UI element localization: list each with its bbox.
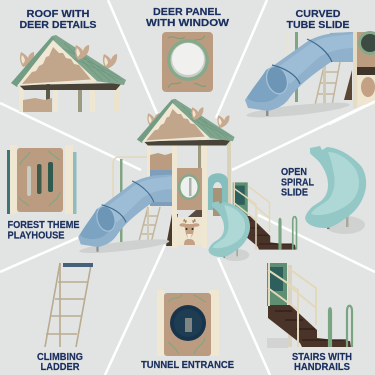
- heading: climbing ladder: CLIMBING: [37, 351, 83, 363]
- window panel: [177, 168, 202, 210]
- heading: deer panel with window: DEER PANEL: [153, 6, 222, 18]
- deer panel: [177, 217, 202, 245]
- heading: forest theme playhouse: [8, 219, 80, 242]
- front posts: [172, 136, 207, 248]
- heading: forest theme playhouse: PLAYHOUSE: [8, 230, 64, 242]
- feature image: stairs with handrails: [267, 263, 352, 348]
- feature image: roof: [11, 35, 126, 112]
- stairs: [233, 182, 296, 250]
- heading: open spiral slide: OPEN: [281, 166, 307, 178]
- heading: curved tube slide: [286, 8, 350, 31]
- feature image: open spiral slide: [305, 146, 366, 234]
- dark under panel: [166, 214, 178, 246]
- spiral slide: [208, 201, 250, 261]
- upper tan panel: [150, 153, 172, 170]
- heading: tunnel entrance: TUNNEL ENTRANCE: [141, 359, 234, 371]
- heading: deer panel with window: [146, 6, 229, 29]
- heading: curved tube slide: TUBE SLIDE: [286, 19, 350, 31]
- heading: stairs with handrails: HANDRAILS: [294, 361, 350, 373]
- ladder: [138, 207, 160, 245]
- heading: open spiral slide: [281, 166, 314, 198]
- feature image: deer panel window: [162, 32, 213, 92]
- back posts: [147, 138, 231, 245]
- heading: climbing ladder: LADDER: [40, 361, 80, 373]
- heading: climbing ladder: [37, 351, 83, 373]
- feature image: tunnel entrance: [157, 290, 219, 356]
- heading: roof with deer details: DEER DETAILS: [20, 19, 96, 31]
- feature image: climbing ladder: [45, 263, 93, 347]
- heading: roof with deer details: [20, 8, 96, 31]
- heading: roof with deer details: ROOF WITH: [26, 8, 90, 20]
- heading: forest theme playhouse: FOREST THEME: [8, 219, 80, 231]
- feature image: forest theme playhouse: [7, 145, 76, 214]
- heading: open spiral slide: SLIDE: [281, 186, 308, 198]
- feature image: curved tube slide: [245, 31, 375, 125]
- heading: stairs with handrails: [292, 351, 352, 373]
- heading: open spiral slide: SPIRAL: [281, 176, 314, 188]
- teal arch: [208, 173, 228, 210]
- roof: [137, 99, 235, 146]
- back rail: [113, 157, 150, 243]
- central play structure: [78, 99, 297, 261]
- heading: stairs with handrails: STAIRS WITH: [292, 351, 352, 363]
- tube slide: [78, 174, 172, 256]
- heading: deer panel with window: WITH WINDOW: [146, 17, 229, 29]
- heading: curved tube slide: CURVED: [296, 8, 341, 20]
